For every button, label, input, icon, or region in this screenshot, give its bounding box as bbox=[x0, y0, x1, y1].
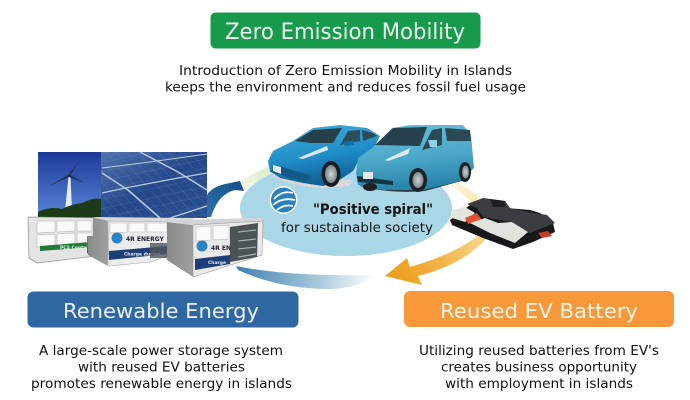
storage container middle bbox=[87, 217, 193, 266]
icon: orange curved arrow bbox=[385, 236, 486, 285]
text: reused battery description bbox=[419, 343, 659, 392]
heading badge: Renewable Energy bbox=[28, 292, 298, 328]
center text: for sustainable society bbox=[281, 220, 433, 236]
center text bbox=[281, 202, 433, 236]
text: renewable energy description: promotes renewable energy in islands bbox=[31, 376, 292, 392]
text: renewable energy description bbox=[31, 343, 292, 392]
wind turbine photo bbox=[38, 152, 102, 218]
text: renewable energy description: with reused EV batteries bbox=[78, 360, 245, 376]
storage container middle: Charge during bbox=[124, 252, 160, 258]
EV battery pack bbox=[450, 198, 555, 249]
PCS container: PCS Container bbox=[60, 245, 97, 251]
intro text: keeps the environment and reduces fossil fuel usage bbox=[165, 80, 526, 96]
center ellipse bbox=[240, 160, 452, 256]
title badge: Zero Emission Mobility bbox=[210, 12, 480, 48]
PCS container bbox=[28, 217, 113, 263]
heading badge: Reused EV Battery bbox=[404, 291, 674, 327]
intro text: Introduction of Zero Emission Mobility in Islands bbox=[179, 63, 512, 79]
storage container front: 4R EN bbox=[211, 245, 231, 252]
arc: yellow fade from cars to battery bbox=[450, 182, 479, 203]
icon: blue curved arrow bbox=[207, 181, 244, 217]
text: renewable energy description: A large-scale power storage system bbox=[39, 343, 283, 359]
storage container front bbox=[167, 218, 263, 277]
center text: "Positive spiral" bbox=[313, 202, 433, 218]
storage container front: Charge bbox=[208, 260, 226, 266]
car: Nissan e-NV200 van bbox=[356, 125, 474, 192]
heading badge: Renewable Energy: Renewable Energy bbox=[63, 299, 259, 323]
title badge: Zero Emission Mobility: Zero Emission Mobility bbox=[225, 19, 465, 45]
logo icon bbox=[270, 186, 298, 214]
solar panel photo bbox=[101, 152, 207, 218]
car: Nissan Leaf bbox=[268, 125, 380, 188]
intro text bbox=[165, 63, 526, 96]
text: reused battery description: with employment in islands bbox=[445, 376, 633, 392]
arc: bottom blue fade bbox=[236, 266, 375, 289]
text: reused battery description: creates business opportunity bbox=[441, 360, 637, 376]
text: reused battery description: Utilizing reused batteries from EV's bbox=[419, 343, 659, 359]
storage container middle: 4R ENERGY bbox=[126, 236, 165, 243]
heading badge: Reused EV Battery: Reused EV Battery bbox=[440, 299, 638, 323]
arc: green fade from arrow to cars bbox=[240, 166, 272, 190]
